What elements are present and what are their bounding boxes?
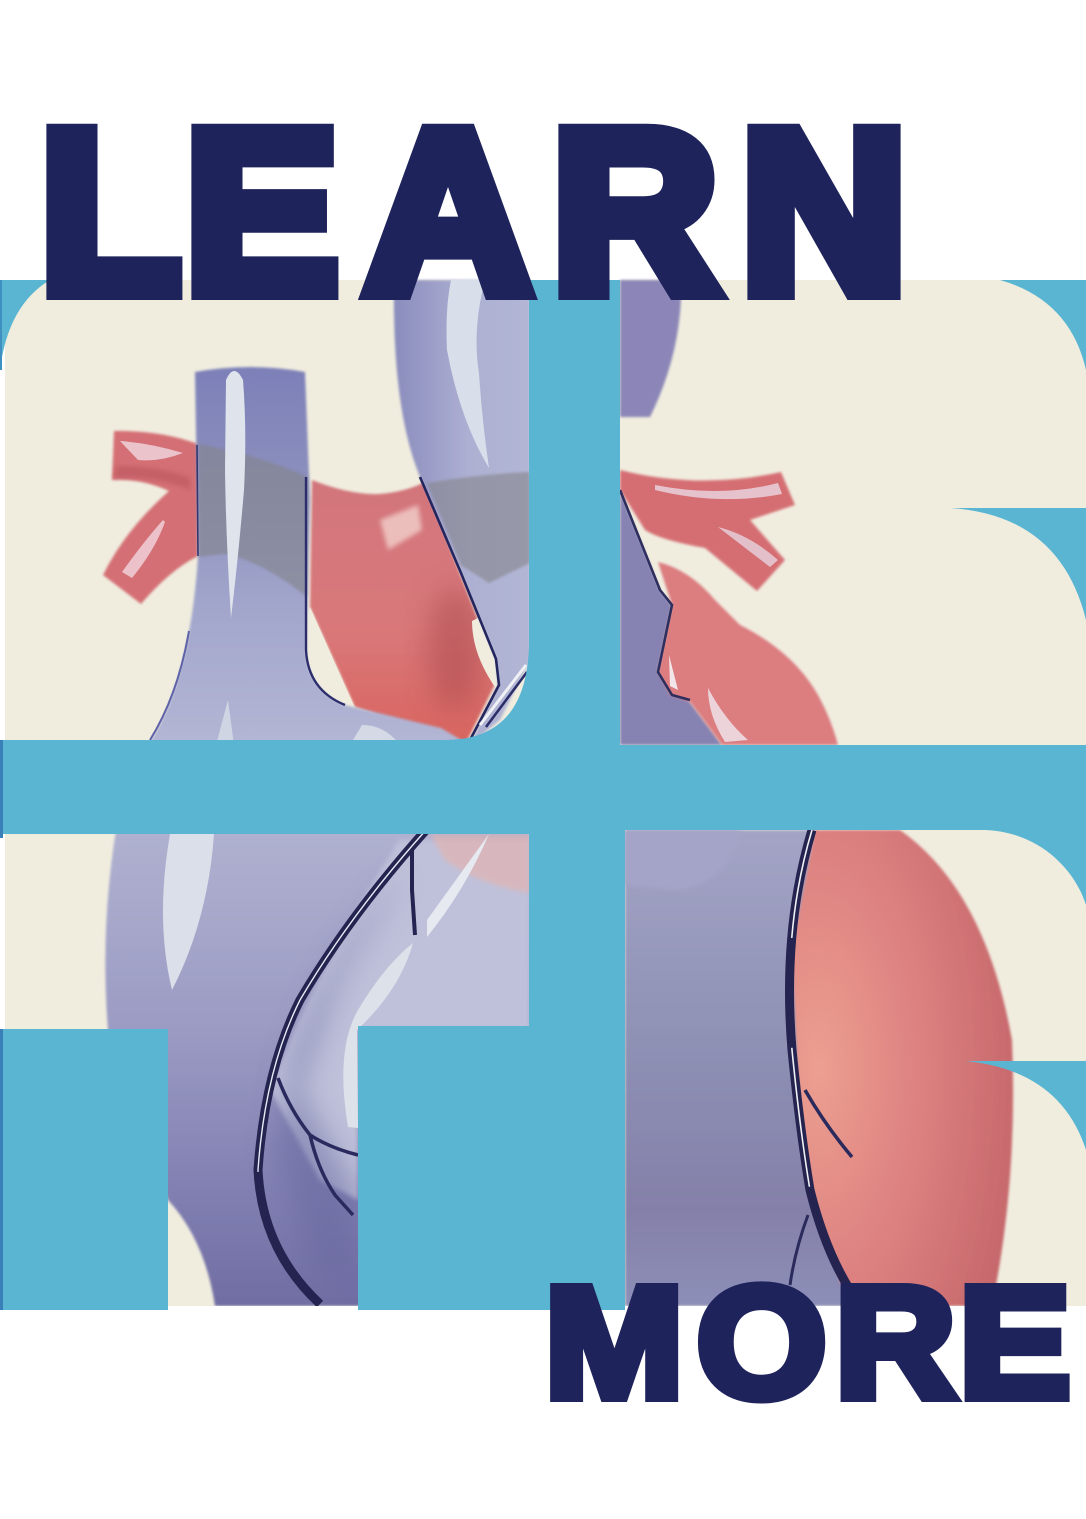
illustration: ascending aorta tube xyxy=(394,280,530,745)
illustration: coronary vessel left xyxy=(258,830,426,1304)
illustration: upper right vessels xyxy=(620,280,838,745)
blue cross and blocks xyxy=(0,280,1086,1310)
title: LEARN: LEARN xyxy=(40,83,907,340)
illustration: upper left pulmonary artery xyxy=(103,431,503,745)
illustration: lower right ventricle xyxy=(625,830,1013,1306)
illustration panel: cream ground xyxy=(5,280,1086,1306)
illustration: lower left heart body xyxy=(105,830,530,1306)
white margin below illustration xyxy=(0,1306,1086,1519)
title: MORE: MORE xyxy=(545,1256,1070,1430)
illustration: superior vena cava xyxy=(148,367,470,745)
